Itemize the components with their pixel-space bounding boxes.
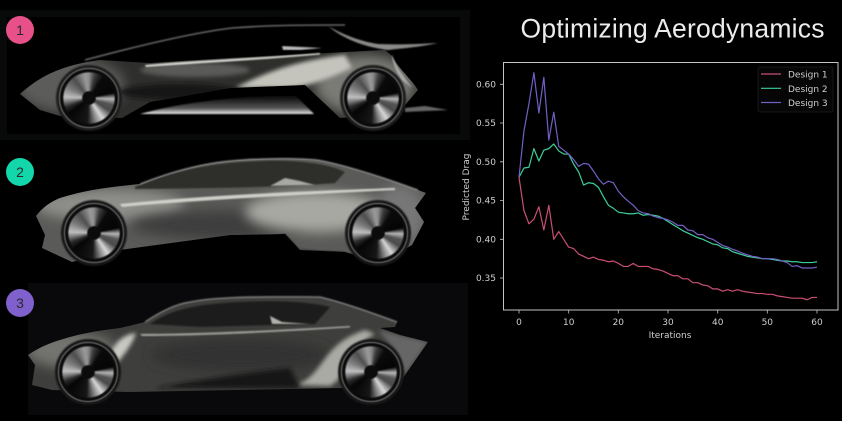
legend: Design 2 <box>788 85 828 95</box>
x axis ticks: 60 <box>811 318 823 328</box>
y axis ticks: 0.40 <box>476 236 496 246</box>
line: design 2 <box>519 144 817 263</box>
window glint <box>282 46 322 50</box>
rear fin <box>328 26 438 50</box>
plot frame <box>504 62 838 310</box>
y axis ticks: 0.55 <box>476 119 496 129</box>
belt line <box>120 188 395 207</box>
badge 1 <box>6 16 34 44</box>
y axis ticks: 0.45 <box>476 196 496 206</box>
line: design 3 <box>519 73 817 268</box>
badge 3 <box>6 289 34 317</box>
front wheel <box>59 68 119 128</box>
x axis label: Iterations <box>649 331 692 341</box>
front wheel <box>58 342 118 402</box>
car body <box>20 290 440 405</box>
x axis ticks <box>516 310 823 328</box>
x axis ticks: 20 <box>613 318 624 328</box>
x axis ticks: 30 <box>662 318 674 328</box>
rear wheel <box>341 342 401 402</box>
panel: design 1 car <box>0 10 470 140</box>
line: design 1 <box>519 177 817 300</box>
sill shadow <box>155 368 300 388</box>
roofline <box>85 25 345 60</box>
front wheel <box>64 203 124 263</box>
window <box>150 301 330 327</box>
line chart: predicted drag <box>462 62 838 341</box>
rear sweep highlight <box>296 330 375 386</box>
wheel arches <box>61 200 127 266</box>
roofline <box>145 297 397 322</box>
wheel arches <box>55 339 121 405</box>
window <box>135 161 345 189</box>
y axis ticks: 0.50 <box>476 158 496 168</box>
rear wheel <box>343 68 403 128</box>
badge 1: 1 <box>16 22 24 38</box>
floor reflection <box>140 95 314 114</box>
sill shadow <box>278 233 346 252</box>
legend: Design 1 <box>788 70 828 80</box>
panel: design 2 car <box>6 157 426 266</box>
rear splitter <box>405 106 448 112</box>
y axis ticks: 0.35 <box>476 274 496 284</box>
wheel arches <box>56 65 122 131</box>
belt highlight <box>145 53 320 67</box>
panel: design 3 car <box>6 283 468 415</box>
rear wheel <box>348 203 408 263</box>
data lines <box>519 73 817 300</box>
car body <box>36 157 426 266</box>
legend <box>758 67 833 112</box>
title: Optimizing Aerodynamics <box>520 14 824 44</box>
x axis ticks: 0 <box>516 318 522 328</box>
tail detail <box>392 54 412 88</box>
roofline <box>140 158 418 190</box>
legend: Design 3 <box>788 99 828 109</box>
rear panel <box>378 330 428 375</box>
y axis label: Predicted Drag <box>462 154 472 220</box>
badge 2 <box>6 158 34 186</box>
y axis ticks <box>476 80 504 284</box>
badge 2: 2 <box>16 164 24 180</box>
badge 3: 3 <box>16 295 24 311</box>
x axis ticks: 10 <box>563 318 575 328</box>
x axis ticks: 50 <box>762 318 773 328</box>
front fender highlight <box>108 333 136 364</box>
y axis ticks: 0.60 <box>476 80 496 90</box>
car body <box>0 25 448 131</box>
belt line <box>140 326 350 336</box>
x axis ticks: 40 <box>712 318 724 328</box>
